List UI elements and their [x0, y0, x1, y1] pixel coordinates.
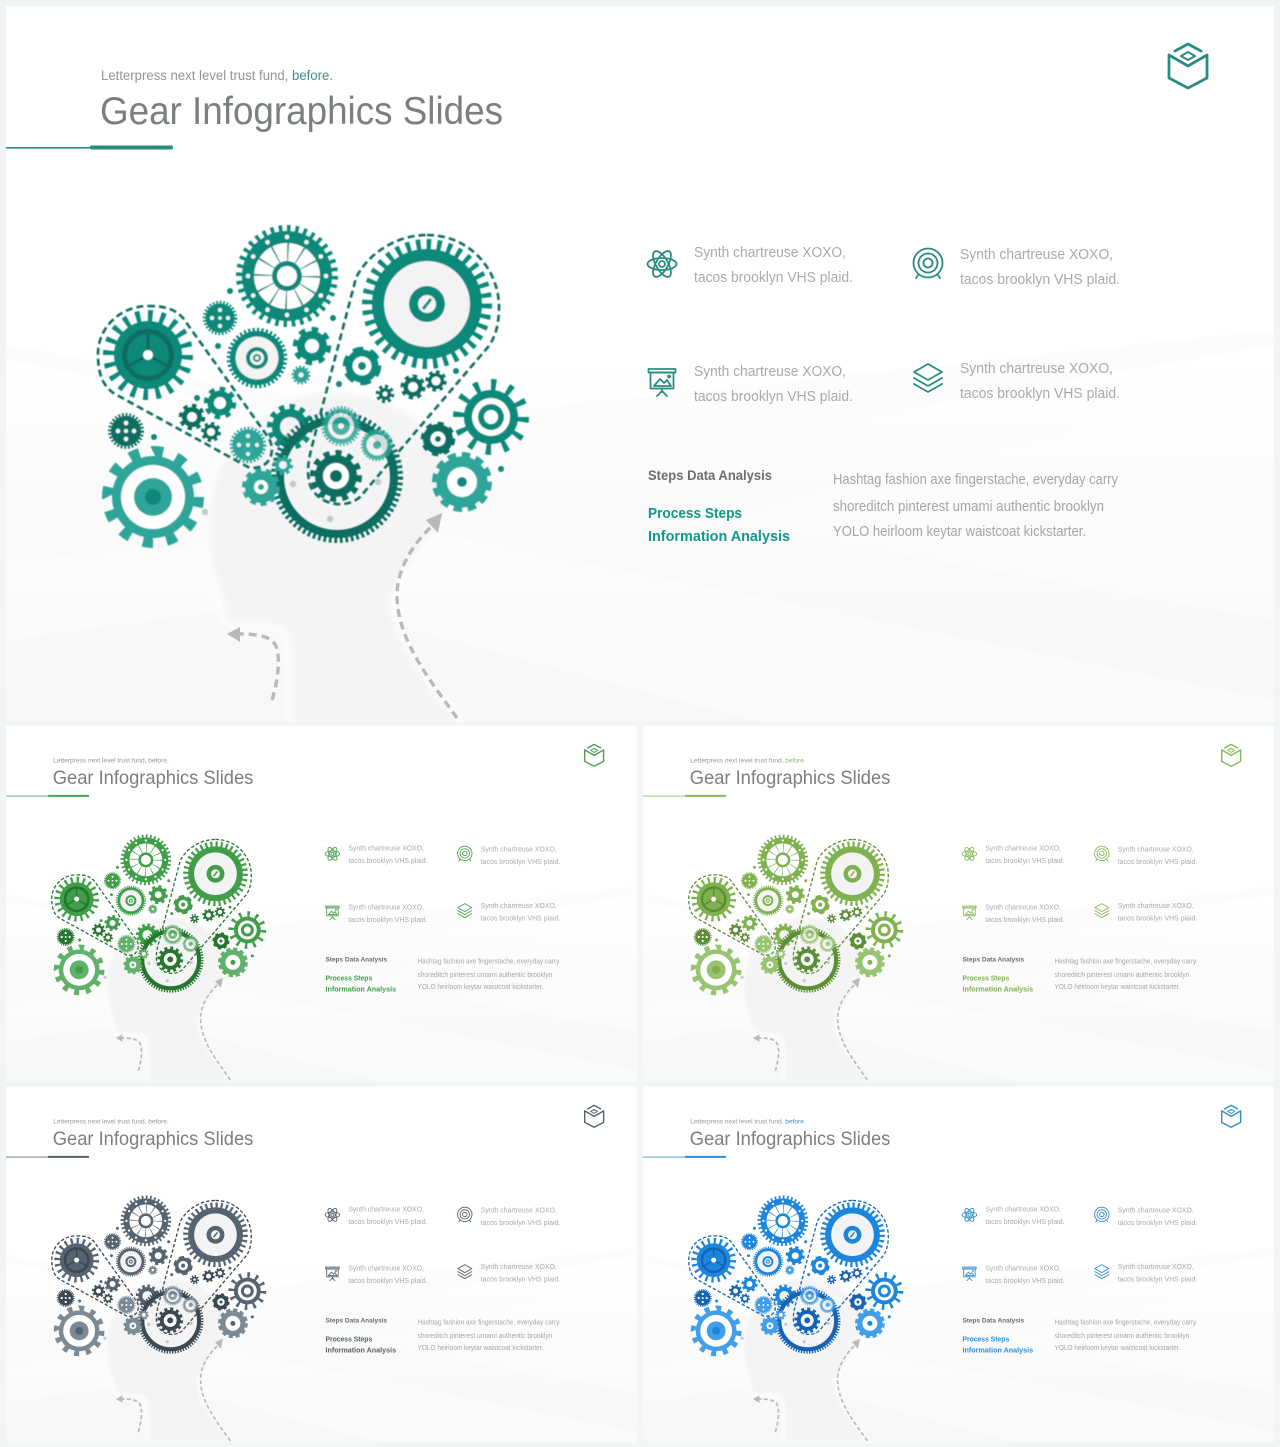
slide: blue: Letterpress next level trust fund, before.: [690, 1118, 806, 1125]
gear: tiny overlap: [274, 456, 292, 474]
slide: lime: Gear Infographics Slides: [690, 767, 890, 789]
slide: green: YOLO heirloom keytar waistcoat kickstarter.: [418, 982, 543, 991]
slide: slate: Letterpress next level trust fund, before.: [53, 1118, 169, 1125]
slide: green: Hashtag fashion axe fingerstache, everyday carry: [418, 956, 560, 965]
subtitle: Letterpress next level trust fund, before.: [101, 68, 333, 83]
paragraph line 2: shoreditch pinterest umami authentic brooklyn: [833, 499, 1104, 515]
arrow: short dashed: [227, 627, 278, 700]
slide: blue: Synth chartreuse XOXO,: [1118, 1205, 1194, 1214]
slide: slate: [6, 1086, 637, 1443]
slide: lime: tacos brooklyn VHS plaid.: [985, 856, 1064, 865]
slide: green: Process Steps: [325, 973, 372, 982]
slide: blue: tacos brooklyn VHS plaid.: [985, 1276, 1064, 1285]
slide: green: [6, 726, 637, 1082]
slide: slate: Process Steps: [325, 1334, 372, 1343]
gears and belts: [98, 228, 523, 542]
slide: slate: tacos brooklyn VHS plaid.: [348, 1217, 427, 1226]
slide: blue: Steps Data Analysis: [962, 1317, 1024, 1324]
arrow: long dashed: [397, 513, 457, 718]
gear illustration: [98, 228, 523, 722]
slide: green: Letterpress next level trust fund, before.: [53, 757, 169, 764]
gear: lower left light: [244, 470, 278, 504]
icon: target: [914, 248, 942, 278]
gear: overlap light right: [362, 430, 392, 460]
slide: lime: [643, 726, 1274, 1082]
feature text 3: Synth chartreuse XOXO,: [694, 364, 846, 380]
head silhouette: [208, 392, 460, 722]
slide: lime: Synth chartreuse XOXO,: [985, 843, 1061, 852]
slide: green: Synth chartreuse XOXO,: [481, 901, 557, 910]
gear: tiny: [293, 367, 309, 383]
slide: lime: Synth chartreuse XOXO,: [1118, 901, 1194, 910]
slide: lime: Steps Data Analysis: [962, 956, 1024, 963]
feature text 1b: tacos brooklyn VHS plaid.: [694, 270, 853, 286]
gear: left dark hub: [109, 316, 187, 394]
feature text 1: Synth chartreuse XOXO,: [694, 245, 846, 261]
dashed belt right: [308, 235, 499, 504]
gear: cluster c: [202, 424, 220, 440]
accent heading 1: Process Steps: [648, 506, 742, 522]
slide: teal main: [6, 6, 1274, 722]
gear: large bottom ring: [274, 414, 400, 540]
slide: blue: YOLO heirloom keytar waistcoat kickstarter.: [1055, 1343, 1180, 1352]
gear: spoked top: [240, 228, 334, 324]
slide: slate: YOLO heirloom keytar waistcoat kickstarter.: [418, 1343, 543, 1352]
icon: presentation board: [648, 369, 676, 396]
paragraph line 3: YOLO heirloom keytar waistcoat kickstarter.: [833, 524, 1086, 540]
slide: blue: Hashtag fashion axe fingerstache, everyday carry: [1055, 1317, 1197, 1326]
slide: blue: tacos brooklyn VHS plaid.: [985, 1217, 1064, 1226]
gear: middle ring: [228, 330, 286, 386]
icon: atom: [648, 248, 676, 280]
paragraph line 1: Hashtag fashion axe fingerstache, everyday carry: [833, 472, 1119, 488]
slide: lime: Information Analysis: [962, 985, 1033, 994]
feature text 2: Synth chartreuse XOXO,: [960, 247, 1113, 263]
gear: cluster b: [180, 406, 204, 428]
slide: lime: Synth chartreuse XOXO,: [985, 903, 1061, 912]
gear: right small: [422, 424, 454, 454]
slide: slate: Steps Data Analysis: [325, 1317, 387, 1324]
gear: star small: [378, 386, 392, 402]
slide: lime: tacos brooklyn VHS plaid.: [1118, 857, 1197, 866]
slide: lime: Process Steps: [962, 973, 1009, 982]
slide: blue: tacos brooklyn VHS plaid.: [1118, 1275, 1197, 1284]
gear: overlap light top: [322, 408, 360, 444]
slide: blue: [643, 1086, 1274, 1443]
slide: blue: shoreditch pinterest umami authentic brooklyn: [1055, 1331, 1189, 1340]
slide: green: tacos brooklyn VHS plaid.: [348, 856, 427, 865]
gear: dotted small: [204, 302, 236, 334]
slide: green: tacos brooklyn VHS plaid.: [481, 914, 560, 923]
title: Gear Infographics Slides: [100, 90, 503, 133]
gear: small c: [427, 372, 445, 390]
slide: blue: tacos brooklyn VHS plaid.: [1118, 1218, 1197, 1227]
slide: green: tacos brooklyn VHS plaid.: [481, 857, 560, 866]
slide: green: Synth chartreuse XOXO,: [348, 843, 424, 852]
slide: slate: tacos brooklyn VHS plaid.: [481, 1218, 560, 1227]
slide: slate: Synth chartreuse XOXO,: [348, 1264, 424, 1273]
slide: slate: Synth chartreuse XOXO,: [348, 1204, 424, 1213]
feature icons: [648, 248, 942, 396]
slide: green: shoreditch pinterest umami authentic brooklyn: [418, 970, 552, 979]
accent heading 2: Information Analysis: [648, 529, 790, 545]
gear: large top right: [368, 244, 486, 364]
slide: green: Synth chartreuse XOXO,: [481, 844, 557, 853]
slide: lime: Synth chartreuse XOXO,: [1118, 844, 1194, 853]
slide: blue: Gear Infographics Slides: [690, 1128, 890, 1150]
small dots: [151, 288, 504, 522]
slide: green: tacos brooklyn VHS plaid.: [348, 915, 427, 924]
dashed belt left: [98, 306, 272, 468]
slide: blue: Synth chartreuse XOXO,: [985, 1264, 1061, 1273]
gear: dotted dark: [110, 415, 142, 447]
slide: blue: Process Steps: [962, 1334, 1009, 1343]
slide: green: Information Analysis: [325, 985, 396, 994]
slide: green: Synth chartreuse XOXO,: [348, 903, 424, 912]
feature text 4: Synth chartreuse XOXO,: [960, 361, 1113, 377]
title underline: [6, 146, 173, 150]
gear: dotted center: [232, 428, 264, 462]
slide: slate: Synth chartreuse XOXO,: [481, 1262, 557, 1271]
slide: lime: Letterpress next level trust fund, before.: [690, 757, 806, 764]
slide: slate: Gear Infographics Slides: [53, 1128, 253, 1150]
feature text 4b: tacos brooklyn VHS plaid.: [960, 386, 1120, 402]
slide: blue: Synth chartreuse XOXO,: [985, 1204, 1061, 1213]
slide: slate: tacos brooklyn VHS plaid.: [481, 1275, 560, 1284]
slide: lime: YOLO heirloom keytar waistcoat kickstarter.: [1055, 982, 1180, 991]
slide: green: Steps Data Analysis: [325, 956, 387, 963]
slide: lime: tacos brooklyn VHS plaid.: [985, 915, 1064, 924]
gear: large light left: [108, 452, 198, 542]
gear: right light: [435, 455, 489, 509]
slide: slate: Hashtag fashion axe fingerstache, everyday carry: [418, 1317, 560, 1326]
slide: lime: tacos brooklyn VHS plaid.: [1118, 914, 1197, 923]
slide: blue: Information Analysis: [962, 1346, 1033, 1355]
icon: layers: [914, 364, 942, 392]
slide: green: Gear Infographics Slides: [53, 767, 253, 789]
slide: lime: shoreditch pinterest umami authentic brooklyn: [1055, 970, 1189, 979]
gear: hex: [345, 349, 379, 383]
slide: slate: tacos brooklyn VHS plaid.: [348, 1276, 427, 1285]
slide: slate: Information Analysis: [325, 1346, 396, 1355]
gear: small eight tooth: [296, 330, 328, 362]
feature text 3b: tacos brooklyn VHS plaid.: [694, 389, 853, 405]
feature text 2b: tacos brooklyn VHS plaid.: [960, 272, 1120, 288]
heading: steps: Steps Data Analysis: [648, 468, 772, 483]
gear: cluster a: [206, 389, 234, 417]
slide: blue: Synth chartreuse XOXO,: [1118, 1262, 1194, 1271]
gear: central: [313, 453, 359, 499]
gear: small b: [402, 376, 424, 398]
slide: slate: Synth chartreuse XOXO,: [481, 1205, 557, 1214]
slide: lime: Hashtag fashion axe fingerstache, everyday carry: [1055, 956, 1197, 965]
gear: behind large ring: [270, 407, 310, 447]
gear: right spiked: [459, 385, 523, 449]
icon: logo cube: [1169, 44, 1207, 88]
slide: slate: shoreditch pinterest umami authentic brooklyn: [418, 1331, 552, 1340]
